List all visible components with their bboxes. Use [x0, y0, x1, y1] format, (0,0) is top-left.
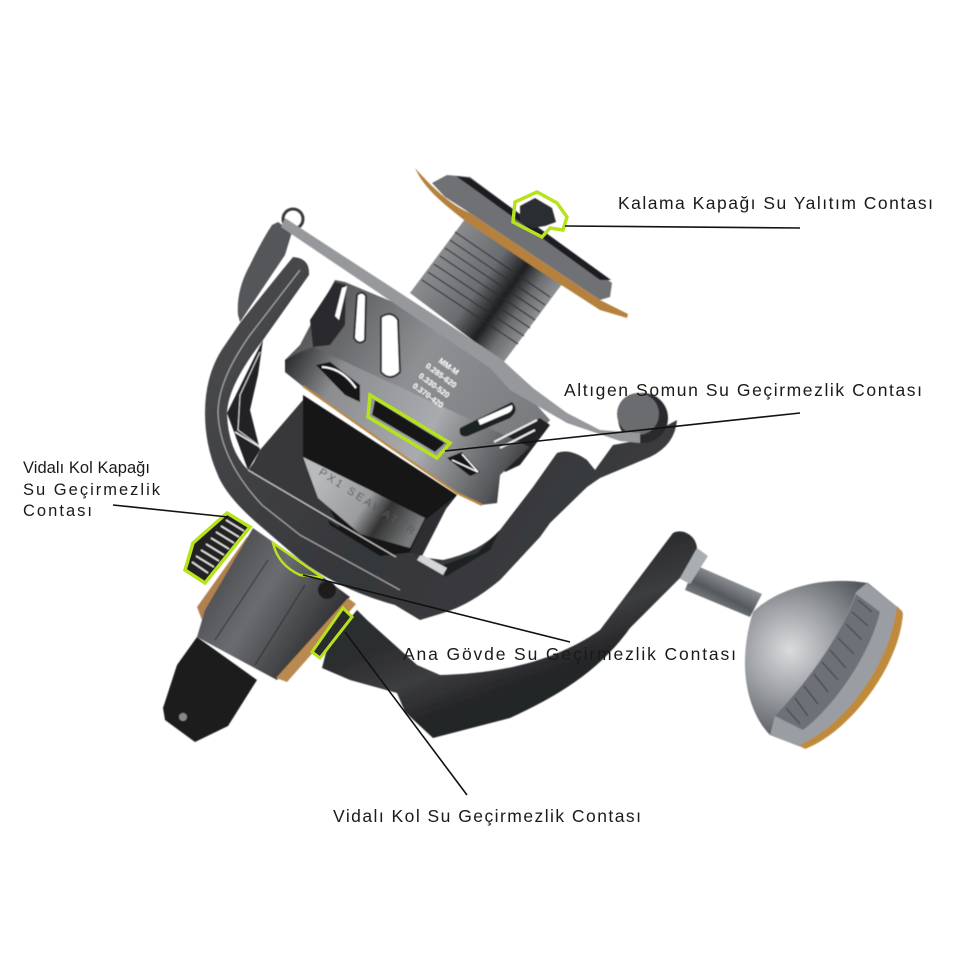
leader line: hex nut [445, 413, 800, 451]
label: main body seal: Ana Gövde Su Geçirmezlik Contası [403, 644, 736, 664]
rotor spec text: 0.330-520 [417, 371, 452, 400]
main frame [205, 222, 677, 620]
rotor spec text [411, 356, 461, 410]
gearbox body [163, 528, 356, 742]
green highlight: crank seal [312, 608, 352, 658]
rotor cup [285, 280, 550, 505]
leader line: main body [303, 575, 570, 642]
shaft lettering: PX1 SEAWATER [316, 466, 417, 538]
shaft cone [248, 395, 457, 557]
spool [410, 168, 628, 363]
label: thread cover seal: Su Geçirmezlik [23, 481, 161, 499]
rotor windows [316, 286, 537, 476]
label: thread cover seal: Contası [23, 502, 92, 520]
rotor spec text: 0.285-620 [424, 361, 459, 390]
green highlight: hex nut [368, 395, 450, 458]
label: thread cover seal [23, 459, 161, 520]
leader line: thread cover [113, 505, 228, 517]
label: crank seal: Vidalı Kol Su Geçirmezlik Contası [333, 806, 641, 826]
fishing reel illustration [163, 168, 903, 749]
rotor spec text: 0.370-420 [411, 381, 446, 410]
green highlight: main body [273, 543, 323, 578]
thread knob [185, 513, 250, 583]
handle knob [677, 548, 903, 749]
leader line: crank seal [345, 632, 467, 795]
rotor spec text: MM-M [437, 356, 461, 377]
label: thread cover seal: Vidalı Kol Kapağı [23, 459, 150, 477]
label: hex nut seal: Altıgen Somun Su Geçirmezlik Contası [564, 380, 922, 400]
leader line: drag cap [565, 226, 800, 228]
crank arm [322, 531, 697, 738]
green highlight: drag cap [513, 192, 567, 237]
label: drag cap seal: Kalama Kapağı Su Yalıtım Contası [618, 193, 933, 213]
green highlight: thread cover [185, 513, 250, 583]
bail wire [281, 209, 668, 443]
